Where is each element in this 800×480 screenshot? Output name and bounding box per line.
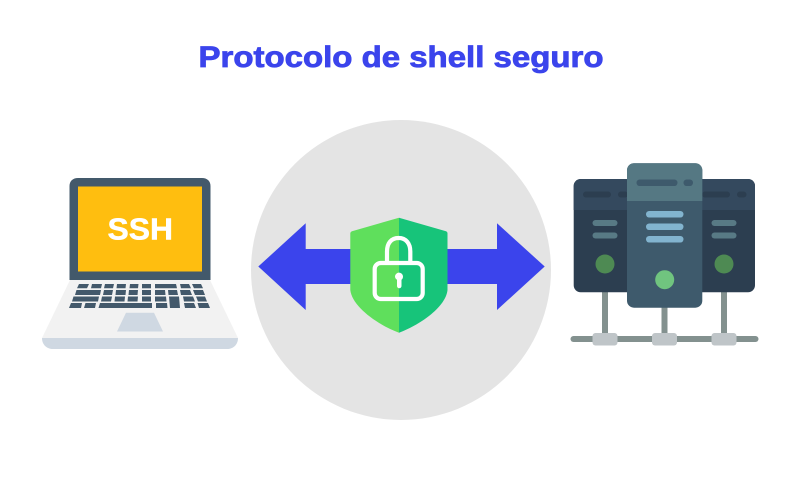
- middle server: [627, 163, 702, 308]
- side servers: [574, 179, 755, 292]
- network connectors: [570, 290, 758, 342]
- side servers top band: [574, 179, 755, 210]
- middle server light: [655, 270, 674, 289]
- touchpad: [117, 313, 163, 332]
- middle server bars: [646, 211, 684, 242]
- arrow: right: [446, 223, 545, 310]
- keyboard: [69, 284, 210, 308]
- title: Protocolo de shell seguro: [198, 41, 604, 74]
- middle server top band: [627, 163, 702, 201]
- left server slots: [583, 192, 746, 198]
- icon: shield with lock: [350, 218, 448, 333]
- side server lights: [596, 254, 614, 274]
- laptop base front edge: [42, 338, 238, 349]
- padlock shackle: [387, 238, 410, 262]
- arrow: left: [258, 223, 352, 310]
- side server bars: [592, 220, 736, 238]
- laptop screen: [78, 186, 202, 272]
- laptop base: [42, 280, 238, 338]
- padlock body: [375, 263, 423, 299]
- icon: server rack: [570, 163, 758, 346]
- shield right half: [399, 218, 448, 333]
- middle server slots: [636, 180, 678, 186]
- screen label: SSH: [108, 212, 173, 246]
- laptop lid: [70, 178, 210, 280]
- padlock: [375, 238, 423, 299]
- shield left half: [350, 218, 399, 333]
- keyhole: [395, 273, 403, 288]
- background circle: [251, 120, 551, 420]
- icon: laptop: [42, 178, 238, 349]
- network nodes: [592, 333, 736, 346]
